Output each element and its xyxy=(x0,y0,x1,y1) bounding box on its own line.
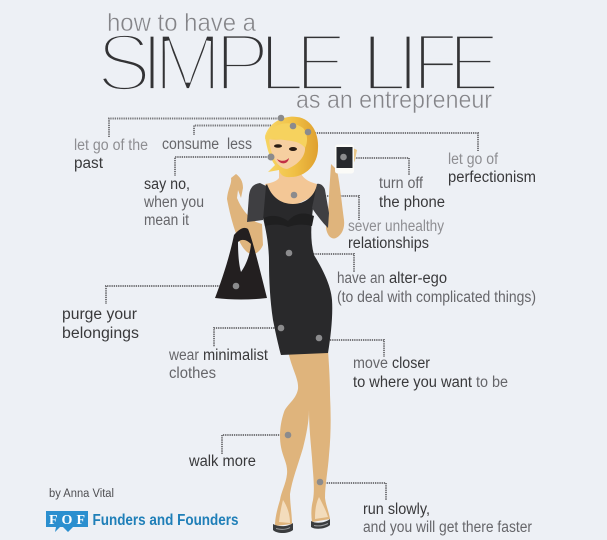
label: let go of the past: past xyxy=(74,155,104,172)
label: purge your belongings: belongings xyxy=(62,325,139,342)
title line: SIMPLE LIFE: E xyxy=(449,18,500,108)
title xyxy=(96,9,500,114)
label: let go of perfectionism: perfectionism xyxy=(448,169,536,186)
label: wear minimalist clothes xyxy=(168,347,269,382)
shoes xyxy=(273,519,330,533)
dress xyxy=(247,183,332,355)
label: sever unhealthy relationships xyxy=(348,218,444,252)
legs xyxy=(275,350,331,526)
credit: by Anna Vital: by Anna Vital xyxy=(49,488,114,500)
label: let go of the past: let go of the xyxy=(74,137,148,154)
title line: SIMPLE LIFE: S xyxy=(96,18,151,108)
label: walk more: walk more xyxy=(188,453,256,470)
title line: SIMPLE LIFE xyxy=(96,18,500,108)
title line: as an entrepreneur: as an entrepreneur xyxy=(296,86,492,114)
label: have an alter-ego: (to deal with complicated things) xyxy=(337,289,536,306)
title line: SIMPLE LIFE: I xyxy=(141,18,163,108)
hair xyxy=(265,117,318,177)
eyes and mouth xyxy=(274,144,297,163)
label: move closer to where you want to be: to be xyxy=(476,374,508,391)
title line: SIMPLE LIFE: E xyxy=(296,18,347,108)
marker dots xyxy=(233,115,347,485)
figure: woman in black dress xyxy=(215,117,357,533)
title line: SIMPLE LIFE: L xyxy=(259,18,305,108)
leader lines xyxy=(106,118,478,500)
title line: SIMPLE LIFE: L xyxy=(361,18,411,108)
title line: SIMPLE LIFE: M xyxy=(154,18,222,108)
logo: Funders and Founders xyxy=(46,511,239,532)
label: let go of perfectionism: let go of xyxy=(448,151,499,168)
face xyxy=(269,139,305,169)
left arm xyxy=(227,174,263,254)
label: sever unhealthy relationships: sever unhealthy xyxy=(348,218,444,235)
logo icon: FOF xyxy=(49,513,85,528)
label: have an alter-ego xyxy=(337,270,536,306)
label: say no, when you mean it: say no, xyxy=(144,176,190,193)
label: say no, when you mean it: when you xyxy=(143,194,204,211)
label: purge your belongings xyxy=(62,306,139,342)
bangs xyxy=(265,123,307,148)
label: let go of perfectionism xyxy=(448,151,536,186)
label: have an alter-ego: have an xyxy=(337,270,385,287)
label: consume less: consume less xyxy=(162,136,252,153)
logo icon xyxy=(46,511,88,532)
label: move closer to where you want to be: to where you want xyxy=(353,374,473,391)
label: run slowly: run slowly, xyxy=(363,501,430,518)
handbag xyxy=(215,228,267,300)
label: purge your belongings: purge your xyxy=(62,306,137,323)
label: turn off the phone: turn off xyxy=(379,175,424,192)
logo wordmark: Funders and Founders xyxy=(92,512,239,529)
label: run slowly: and you will get there faster xyxy=(363,519,532,536)
title line: SIMPLE LIFE: F xyxy=(413,18,460,108)
neck and chest xyxy=(265,170,317,206)
label: move closer to where you want to be: closer xyxy=(392,355,430,372)
label: run slowly xyxy=(363,501,532,536)
right arm xyxy=(326,164,344,238)
label: turn off the phone: the phone xyxy=(379,194,445,211)
label: say no, when you mean it xyxy=(143,176,204,229)
label: wear minimalist clothes: clothes xyxy=(169,365,216,382)
label: move closer to where you want to be: move xyxy=(353,355,388,372)
label: let go of the past xyxy=(74,137,148,172)
label: have an alter-ego: alter-ego xyxy=(389,270,447,287)
title line: SIMPLE LIFE: I xyxy=(397,18,419,108)
label: sever unhealthy relationships: relationships xyxy=(348,235,429,252)
phone xyxy=(335,144,357,174)
title line: SIMPLE LIFE: P xyxy=(215,18,269,108)
label: say no, when you mean it: mean it xyxy=(144,212,190,229)
title line: how to have a: how to have a xyxy=(107,9,256,37)
label: wear minimalist clothes: wear xyxy=(168,347,199,364)
label: turn off the phone xyxy=(379,175,445,211)
label: move closer to where you want to be xyxy=(353,355,508,391)
label: wear minimalist clothes: minimalist xyxy=(203,347,269,364)
